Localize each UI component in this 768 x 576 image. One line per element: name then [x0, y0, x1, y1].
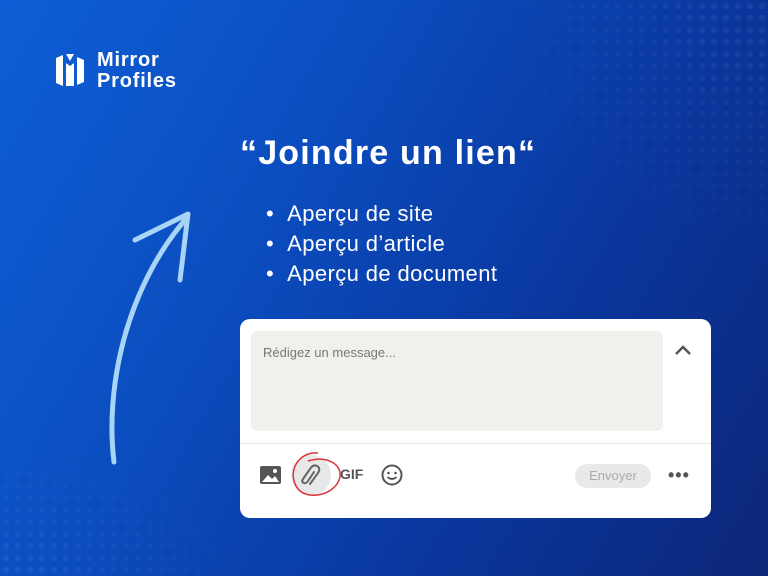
- bullet list: • Aperçu de document: [266, 261, 497, 286]
- logo text: Mirror: [97, 49, 160, 71]
- icon: attachment highlighted: [291, 452, 341, 496]
- message card: [240, 319, 711, 518]
- textarea: [251, 331, 663, 431]
- bullet list: • Aperçu de site: [266, 201, 433, 226]
- bullet list: [266, 201, 497, 286]
- icon: emoji: [382, 464, 402, 486]
- icon: image: [260, 466, 281, 484]
- icon: logo mark: [56, 54, 84, 86]
- title: “Joindre un lien“: [240, 134, 536, 172]
- GIF label: GIF: [340, 466, 363, 482]
- send button: [575, 464, 651, 488]
- logo: [56, 49, 177, 92]
- bullet list: • Aperçu d’article: [266, 231, 445, 256]
- arrow: [109, 212, 190, 464]
- logo text: [97, 49, 177, 92]
- textarea: Rédigez un message...: [263, 345, 396, 360]
- icon: chevron up: [675, 345, 691, 355]
- logo text: Profiles: [97, 70, 177, 92]
- send button: Envoyer: [589, 468, 637, 483]
- icon: more: •••: [668, 465, 690, 485]
